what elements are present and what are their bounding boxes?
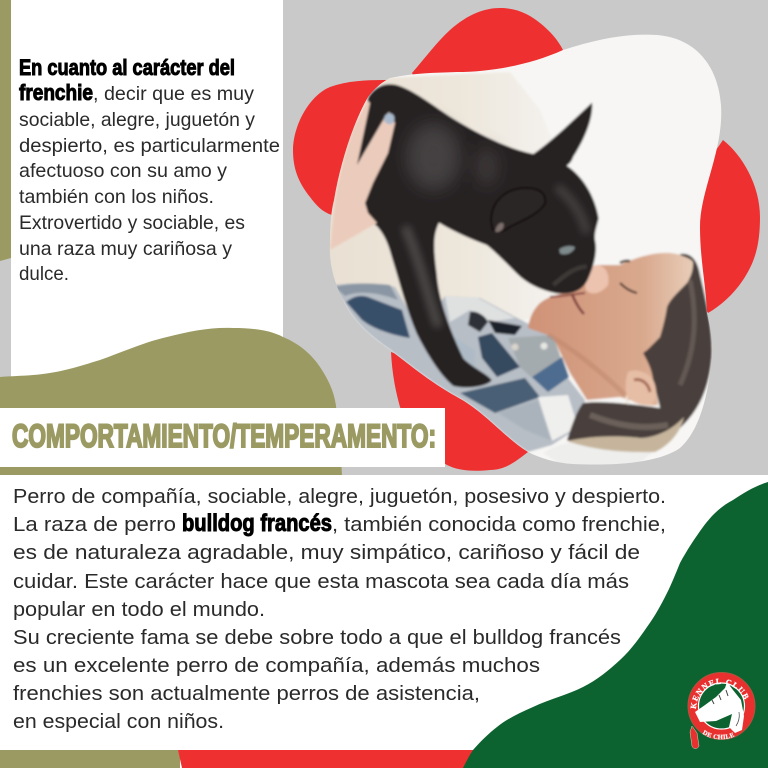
text block: character of the frenchie: En cuanto al carácter del bbox=[19, 55, 235, 80]
text block: description of the breed: Su creciente fama se debe sobre todo a que el bulldog francés bbox=[13, 626, 621, 649]
text block: description of the breed: es de naturaleza agradable, muy simpático, cariñoso y fácil de bbox=[13, 541, 640, 564]
text block: character of the frenchie: afectuoso con su amo y bbox=[19, 160, 227, 182]
text block: description of the breed: frenchies son actualmente perros de asistencia, bbox=[13, 682, 480, 705]
text block: description of the breed: es un excelente perro de compañía, además muchos bbox=[13, 654, 540, 677]
text block: description of the breed: , también conocida como frenchie, bbox=[332, 513, 666, 536]
bottom olive band bbox=[0, 750, 180, 768]
text block: character of the frenchie: sociable, alegre, juguetón y bbox=[19, 109, 255, 131]
text block: description of the breed bbox=[13, 485, 666, 733]
shirt bbox=[333, 283, 585, 452]
panel: white text panel bbox=[11, 0, 283, 385]
face and neck bbox=[528, 253, 693, 405]
title bar: white background bbox=[0, 408, 445, 467]
logo: Kennel Club de Chile bbox=[688, 672, 756, 749]
text block: character of the frenchie: Extrovertido y sociable, es bbox=[19, 212, 245, 234]
dog bbox=[353, 84, 599, 387]
sofa cushion bbox=[330, 72, 547, 320]
green corner shape bbox=[463, 482, 768, 768]
heading: comportamiento / temperamento: COMPORTAMIENTO/TEMPERAMENTO: bbox=[12, 418, 436, 454]
text block: character of the frenchie: despierto, es particularmente bbox=[19, 135, 280, 157]
text block: character of the frenchie: una raza muy cariñosa y bbox=[19, 238, 232, 260]
text block: description of the breed: cuidar. Este carácter hace que esta mascota sea cada día más bbox=[13, 570, 629, 593]
background: white lower area bbox=[0, 475, 768, 768]
text block: character of the frenchie: frenchie bbox=[19, 80, 93, 105]
hair bbox=[567, 254, 712, 452]
hand with blue nail bbox=[330, 100, 395, 250]
text block: description of the breed: en especial con niños. bbox=[13, 710, 224, 733]
olive strip at top left bbox=[0, 0, 11, 261]
olive wave shape bbox=[0, 328, 342, 475]
text block: description of the breed: La raza de perro bbox=[13, 513, 176, 536]
photo: woman and french bulldog bbox=[330, 34, 722, 464]
text block: character of the frenchie: dulce. bbox=[19, 263, 69, 285]
bottom red band bbox=[178, 750, 490, 768]
text block: character of the frenchie bbox=[19, 55, 280, 285]
text block: character of the frenchie: , decir que es muy bbox=[93, 83, 254, 105]
text block: description of the breed: bulldog francés bbox=[182, 510, 332, 537]
background: gray upper area bbox=[0, 0, 768, 475]
logo: Kennel Club de Chile: DE CHILE bbox=[702, 730, 734, 740]
white fabric at bottom bbox=[546, 444, 647, 464]
photo backdrop bbox=[333, 34, 722, 462]
text block: character of the frenchie: también con los niños. bbox=[19, 186, 214, 208]
text block: description of the breed: Perro de compañía, sociable, alegre, juguetón, posesivo y despierto. bbox=[13, 485, 666, 508]
red blob behind photo bbox=[293, 8, 760, 471]
logo: Kennel Club de Chile: KENNEL CLUB bbox=[690, 678, 748, 710]
text block: description of the breed: popular en todo el mundo. bbox=[13, 598, 265, 621]
